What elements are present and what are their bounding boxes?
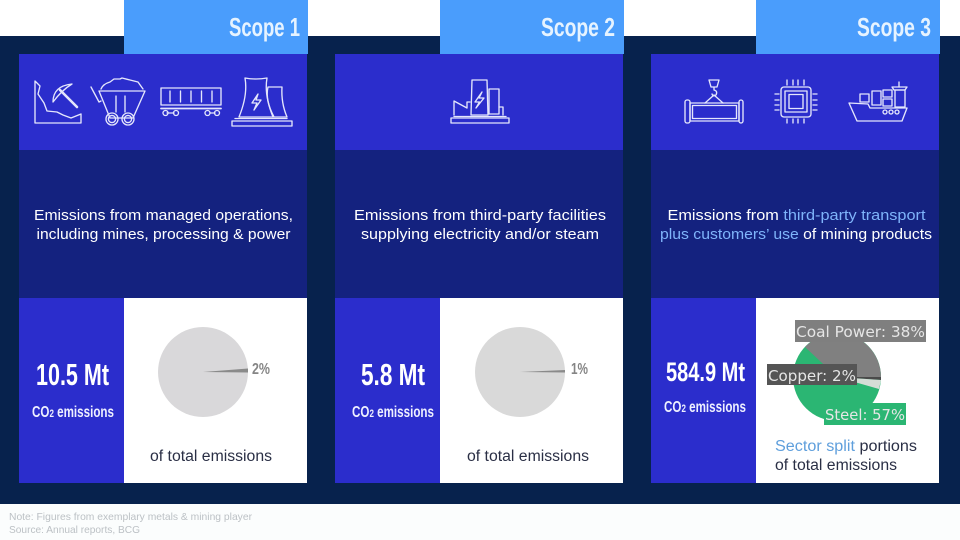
pie chart: 1% xyxy=(475,327,588,417)
footnote xyxy=(9,511,252,536)
scope 1 header tab: Scope 1 xyxy=(229,12,300,42)
pie chart: 2% xyxy=(158,327,270,417)
scope 3 stat: 584.9 Mt xyxy=(666,357,745,387)
scope 1 header tab xyxy=(124,0,308,54)
icon: mine cart xyxy=(91,78,145,125)
pie chart: 2%: 2% xyxy=(252,361,270,378)
scope 3 description: plus customers’ use of mining products xyxy=(660,226,932,243)
pie chart: 1%: 1% xyxy=(571,361,588,378)
icon: rail wagon xyxy=(161,88,221,116)
scope 2 description xyxy=(354,207,606,243)
scope 1 description: Emissions from managed operations, xyxy=(34,207,293,224)
caption xyxy=(775,438,917,474)
caption: Sector split portions xyxy=(775,438,917,455)
scope 3 icon band xyxy=(651,54,939,150)
scope 3 stat xyxy=(651,298,756,483)
icon: cooling towers xyxy=(232,78,292,126)
icon: pipe on crane hook xyxy=(685,80,743,123)
scope 1 description: including mines, processing & power xyxy=(36,226,290,243)
scope 2 stat: CO2 emissions xyxy=(352,404,434,421)
icon: microchip xyxy=(775,80,817,123)
label: coal power: Coal Power: 38% xyxy=(796,323,925,341)
scope 1 pie panel xyxy=(124,298,307,483)
footnote: Source: Annual reports, BCG xyxy=(9,524,140,536)
scope 2 pie panel xyxy=(440,298,623,483)
label: steel: Steel: 57% xyxy=(825,406,905,424)
scope 2 stat: 5.8 Mt xyxy=(361,357,425,392)
scope 2 stat xyxy=(335,298,440,483)
scope 1 description band xyxy=(19,150,307,298)
scope 1 icon band xyxy=(19,54,307,150)
scope 3 pie panel xyxy=(756,298,939,483)
scope 3 stat: CO2 emissions xyxy=(664,399,746,416)
scope 3 header tab: Scope 3 xyxy=(857,12,931,42)
caption: of total emissions xyxy=(150,448,272,465)
panel: scope 1 xyxy=(19,0,308,483)
scope 3 header tab xyxy=(756,0,940,54)
pie chart: sector split xyxy=(767,320,926,425)
scope 2 header tab: Scope 2 xyxy=(541,12,615,42)
icon: power plant xyxy=(451,80,509,123)
scope 3 description xyxy=(660,207,932,243)
scope 1 description xyxy=(34,207,293,243)
caption: of total emissions xyxy=(467,448,589,465)
scope 1 stat xyxy=(19,298,124,483)
panel: scope 2 xyxy=(335,0,624,483)
scope 1 stat: CO2 emissions xyxy=(32,404,114,421)
scope 3 description band xyxy=(651,150,939,298)
scope 2 icon band xyxy=(335,54,623,150)
scope 1 stat: 10.5 Mt xyxy=(36,357,109,392)
icon: mine with pickaxe xyxy=(35,81,81,123)
scope 2 description: Emissions from third-party facilities xyxy=(354,207,606,224)
label: copper: Copper: 2% xyxy=(768,367,856,385)
scope 3 description: Emissions from third-party transport xyxy=(668,207,926,224)
caption: of total emissions xyxy=(775,457,897,474)
panel: scope 3 xyxy=(651,0,940,483)
scope 2 description: supplying electricity and/or steam xyxy=(361,226,599,243)
scope 2 description band xyxy=(335,150,623,298)
icon: container ship xyxy=(849,82,907,121)
scope 2 header tab xyxy=(440,0,624,54)
footnote: Note: Figures from exemplary metals & mining player xyxy=(9,511,252,523)
